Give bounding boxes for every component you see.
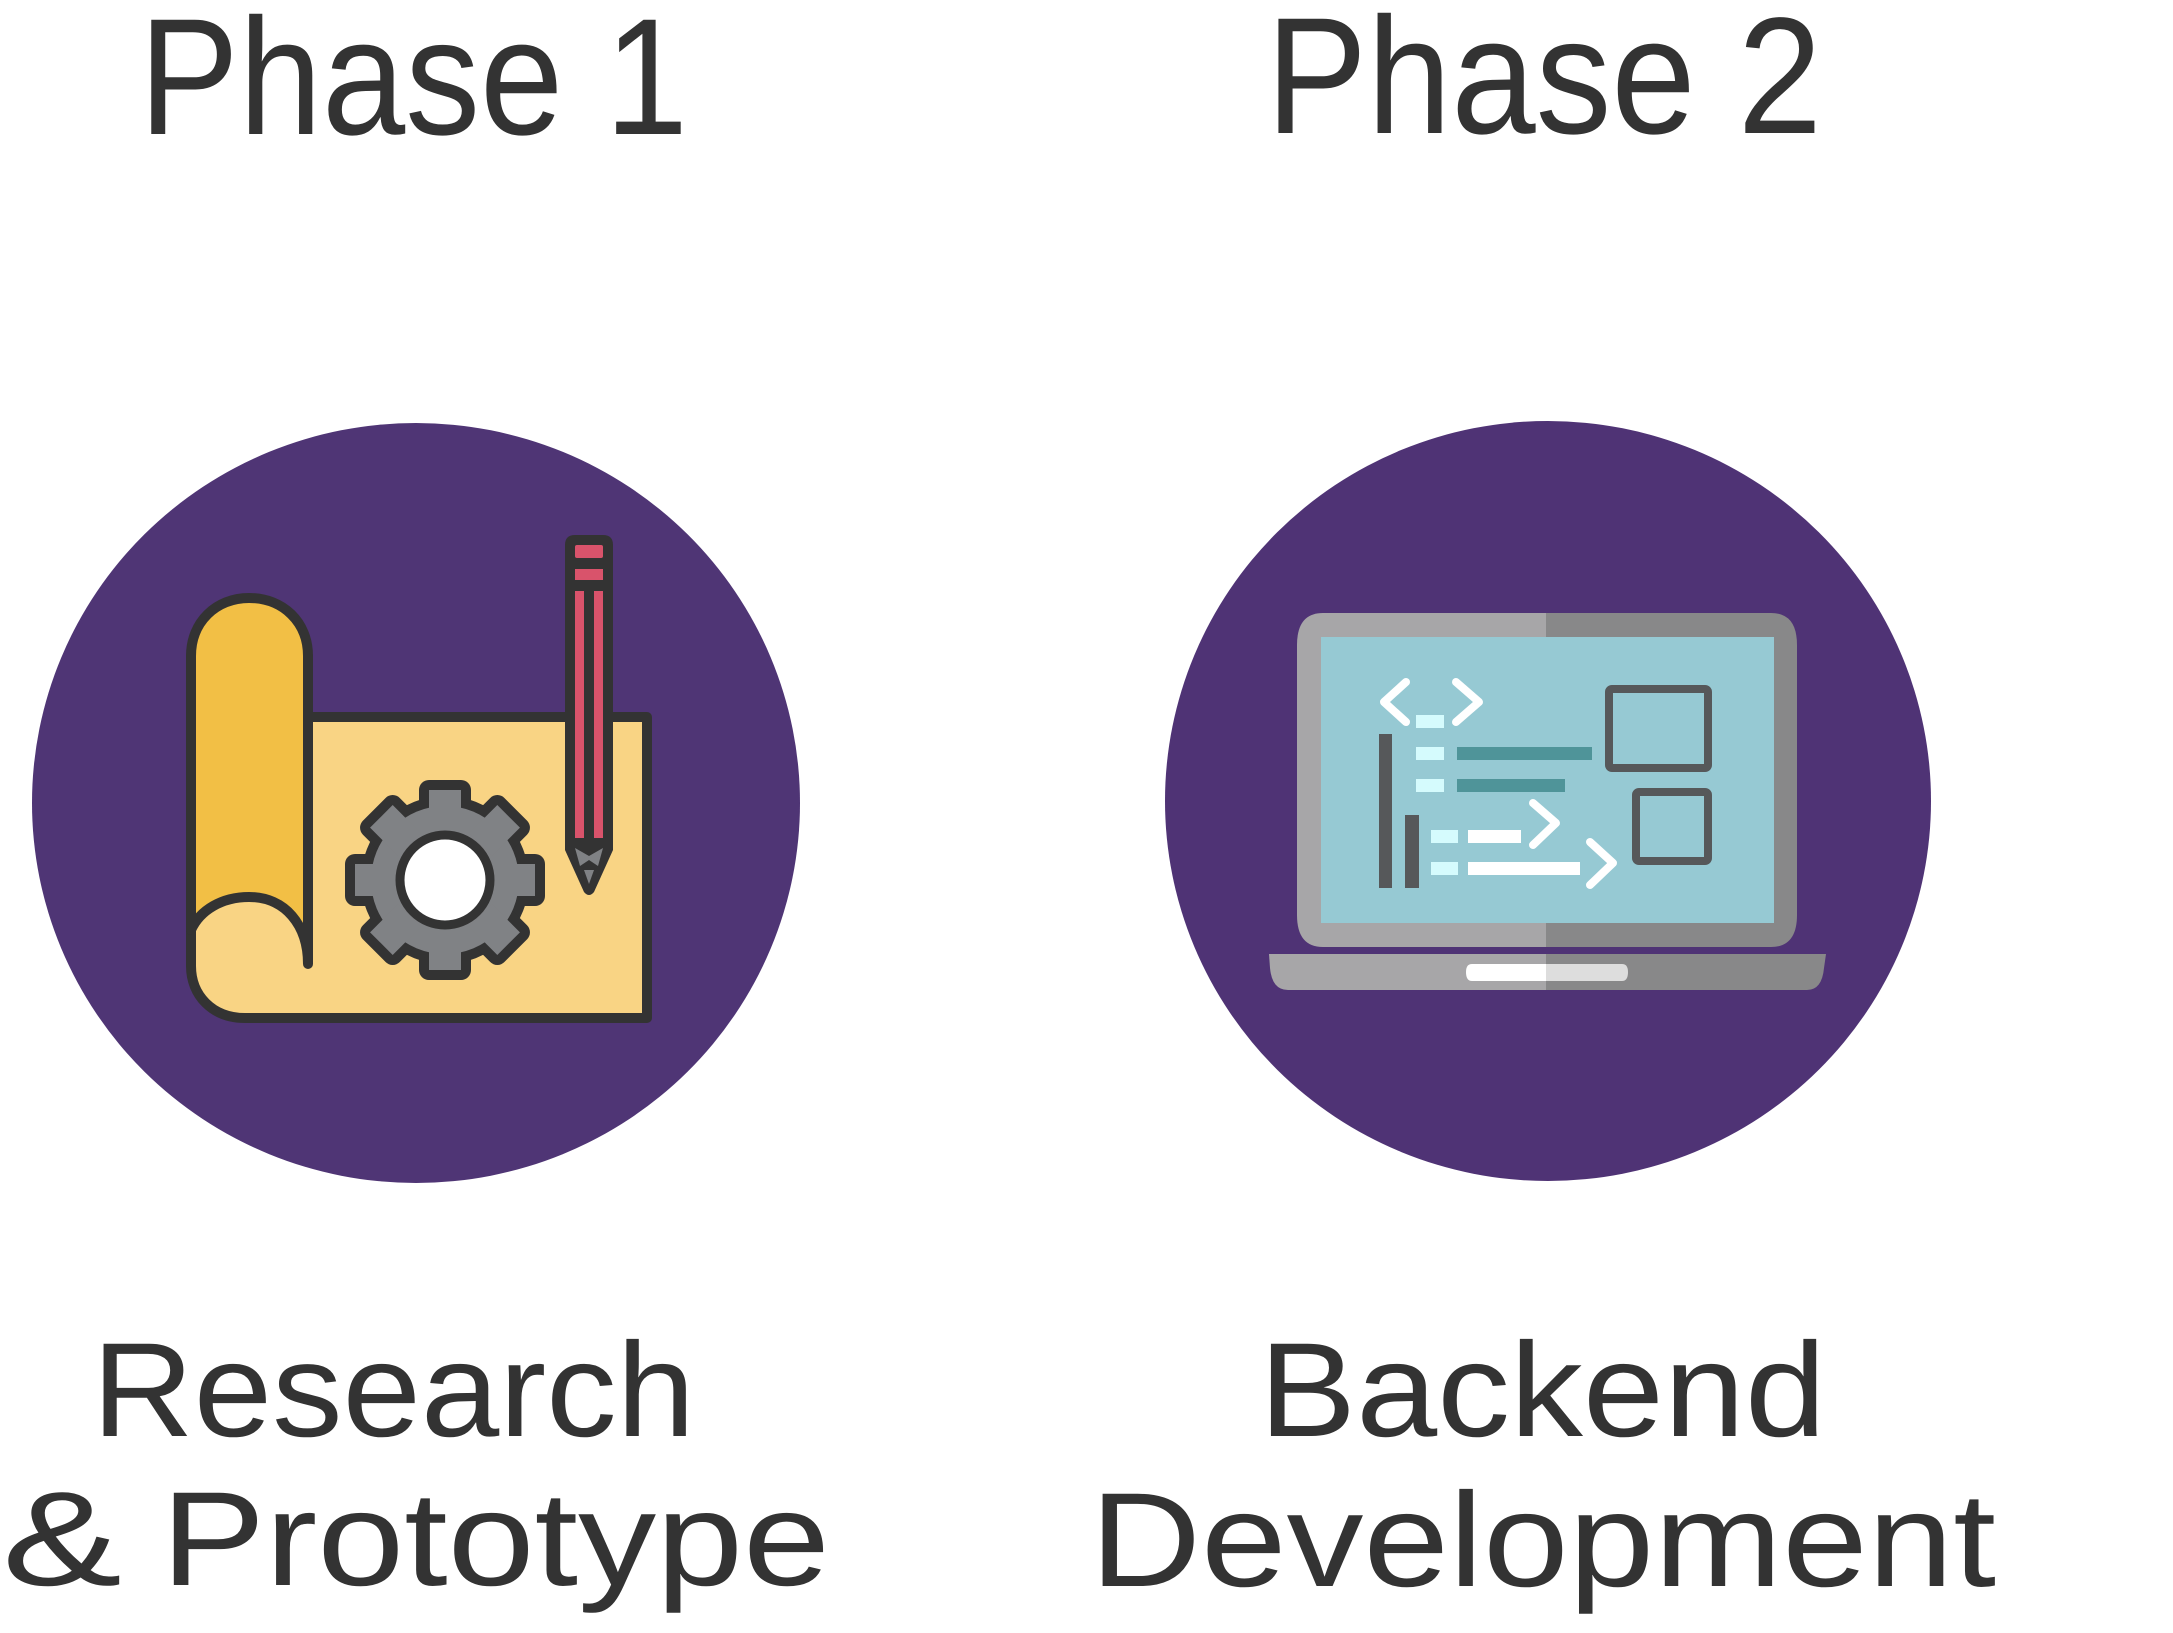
icon: laptop [1269,613,1826,990]
label: Research & Prototype: Prototype [161,1465,830,1614]
laptop screen [1321,637,1774,923]
laptop base [1269,954,1546,990]
paper outline [191,717,647,1018]
code lines [1379,715,1592,888]
trackpad [1466,964,1546,981]
paper fill [191,720,647,1018]
panel: phase 2 [1090,0,1996,1615]
label: Research & Prototype [2,1316,830,1614]
code brackets [1384,682,1613,885]
icon: gear [355,790,535,970]
label: Backend Development: Backend [1259,1316,1826,1465]
layout boxes [1609,689,1708,861]
label: Research & Prototype: & [2,1465,122,1614]
icon: pencil [565,535,613,895]
label: Backend Development: Development [1090,1466,1996,1615]
panel: phase 1 [2,0,830,1614]
label: Research & Prototype: Research [92,1316,695,1465]
label: Backend Development [1090,1316,1996,1615]
laptop lid [1297,613,1546,947]
icon: blueprint scroll [191,598,647,1018]
icon circle: phase 1 [32,423,800,1183]
rolled paper end [191,598,308,964]
icon circle: phase 2 [1165,421,1931,1181]
